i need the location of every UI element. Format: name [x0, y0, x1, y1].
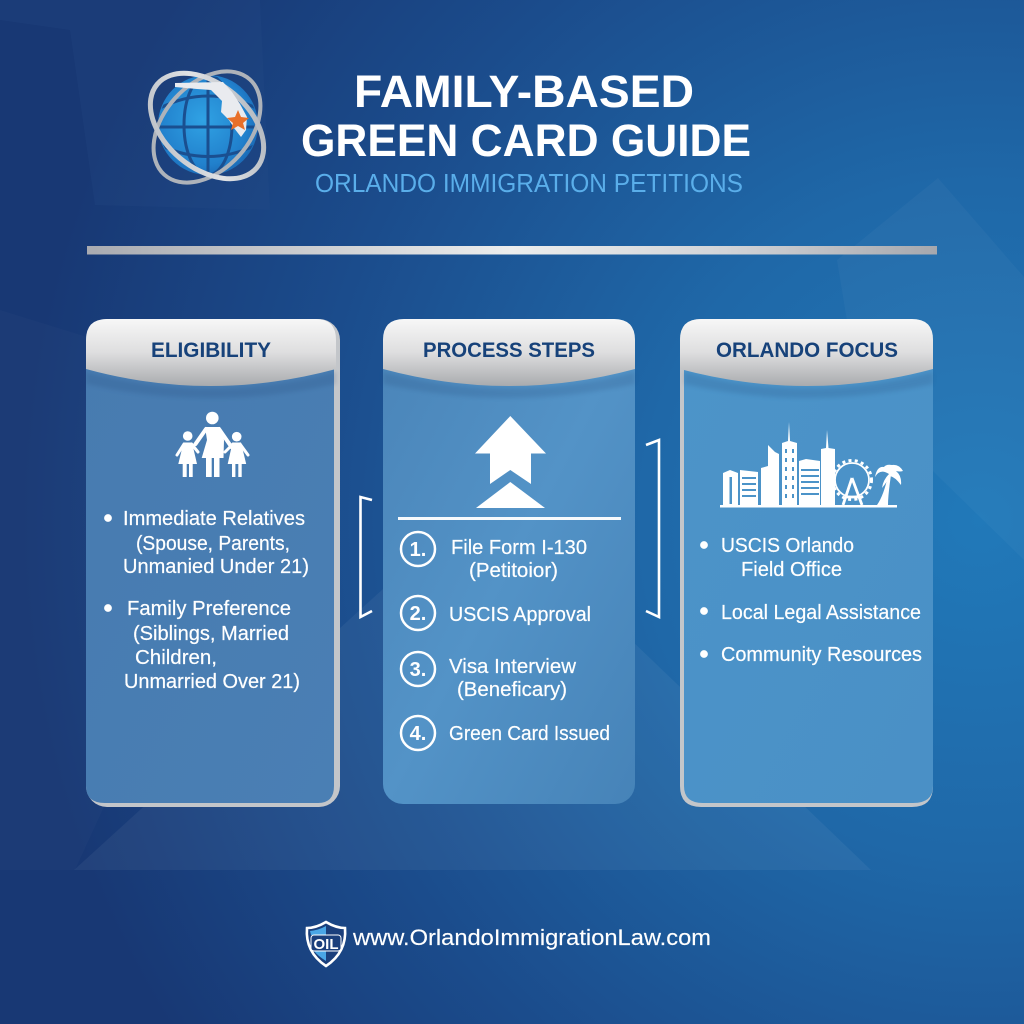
title: FAMILY-BASED [354, 66, 694, 117]
list: Orlando resources: Field Office [741, 558, 842, 581]
panel header [86, 319, 336, 386]
list: eligibility items: Family Preference [127, 597, 291, 620]
heading: PROCESS STEPS [423, 339, 595, 362]
step 4: 4. [410, 723, 426, 745]
list: eligibility items: Unmarried Over 21) [124, 670, 300, 693]
divider line [398, 517, 621, 520]
icon: family [177, 412, 248, 477]
icon: up arrow [475, 416, 546, 508]
step 3: 3. [410, 659, 426, 681]
bracket: right [646, 440, 659, 617]
panel: eligibility [86, 319, 340, 807]
step 1: File Form I-130 [451, 536, 587, 559]
list: Orlando resources: Community Resources [721, 643, 922, 666]
list: eligibility items [104, 507, 309, 693]
list: eligibility items: (Siblings, Married [133, 622, 289, 645]
list: Orlando resources: USCIS Orlando [721, 534, 854, 557]
step 2: USCIS Approval [449, 603, 591, 626]
step 1: 1. [410, 539, 426, 561]
title [301, 66, 751, 166]
step 3 [401, 652, 576, 701]
list: eligibility items: Immediate Relatives [123, 507, 305, 530]
bracket: left [360, 497, 372, 617]
subtitle: ORLANDO IMMIGRATION PETITIONS [315, 168, 743, 198]
list: eligibility items: (Spouse, Parents, [136, 532, 290, 555]
panel: orlando focus [680, 319, 933, 807]
panel header [383, 319, 635, 386]
footer [307, 922, 711, 966]
icon: Florida silhouette [175, 82, 247, 137]
icon: orange star [227, 110, 249, 130]
heading: ELIGIBILITY [151, 339, 271, 362]
step 4 [401, 716, 610, 750]
step 4: Green Card Issued [449, 722, 610, 745]
title: GREEN CARD GUIDE [301, 115, 751, 166]
step 3: (Beneficary) [457, 678, 567, 701]
icon: Orlando skyline [720, 422, 903, 508]
step 2 [401, 596, 591, 630]
icon: shield logo [307, 922, 345, 966]
divider [87, 246, 937, 254]
step 1 [401, 532, 587, 582]
panel header [680, 319, 933, 386]
logo: globe with Florida and orbit rings [148, 69, 266, 185]
list: Orlando resources: Local Legal Assistance [721, 601, 921, 624]
panel: process steps [383, 319, 635, 804]
icon: shield logo: OIL [314, 936, 338, 953]
step 2: 2. [410, 603, 426, 625]
step 1: (Petitoior) [469, 559, 558, 582]
heading: ORLANDO FOCUS [716, 339, 898, 362]
step 3: Visa Interview [449, 655, 576, 678]
list: eligibility items: Children, [135, 646, 217, 669]
list: Orlando resources [700, 534, 922, 666]
list: eligibility items: Unmanied Under 21) [123, 555, 309, 578]
website: www.OrlandoImmigrationLaw.com [352, 925, 711, 950]
